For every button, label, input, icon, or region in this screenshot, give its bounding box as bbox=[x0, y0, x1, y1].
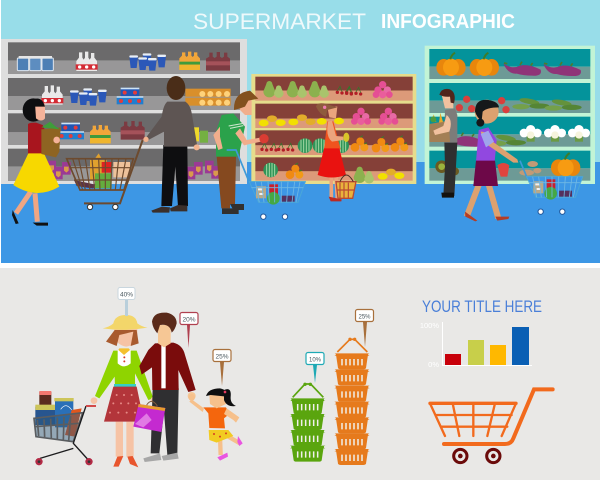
person: man with grocery bag bbox=[429, 89, 457, 198]
shopping cart: blue, right bbox=[520, 161, 583, 214]
panel: vegetable shelf bbox=[425, 46, 595, 184]
shopping cart: blue, left bbox=[227, 150, 305, 219]
divider band bbox=[0, 263, 600, 268]
person: mother with hat bbox=[91, 315, 157, 467]
bar chart: 100% bbox=[420, 321, 439, 330]
icon: magenta shopping bag bbox=[133, 401, 165, 432]
tag: 10%: 10% bbox=[309, 358, 322, 364]
bar chart bbox=[420, 321, 532, 369]
person: man in green shirt bbox=[213, 91, 269, 214]
panel: fruit shelf bbox=[251, 74, 416, 184]
tag: 20%: 20% bbox=[182, 316, 196, 324]
tag: 40% bbox=[118, 288, 135, 316]
person: father in red jacket bbox=[139, 313, 196, 462]
person: child bbox=[188, 388, 243, 461]
tag: 25% (child) bbox=[213, 350, 231, 386]
lower panel background bbox=[0, 268, 600, 480]
person: woman in red dress bbox=[316, 103, 349, 201]
tag: 25% (child): 25% bbox=[215, 354, 229, 360]
person: woman in yellow skirt bbox=[12, 98, 61, 226]
tag: 20% bbox=[180, 312, 198, 348]
basket stack: green bbox=[289, 383, 326, 462]
title: INFOGRAPHIC bbox=[381, 11, 515, 33]
tag: 25% (baskets) bbox=[356, 310, 374, 347]
panel: grey grocery shelf bbox=[1, 39, 247, 184]
title: SUPERMARKET bbox=[193, 9, 366, 34]
shopping cart: brown bbox=[67, 140, 143, 210]
chart heading: YOUR TITLE HERE bbox=[422, 298, 542, 316]
person: man in grey sweater bbox=[143, 76, 200, 213]
tag: 25% (baskets): 25% bbox=[358, 314, 371, 320]
scene floor bbox=[1, 162, 600, 263]
shopping cart: grey with goods bbox=[34, 391, 96, 465]
person: woman in purple top bbox=[465, 100, 518, 221]
basket stack: orange bbox=[333, 338, 370, 465]
tag: 10% bbox=[306, 352, 324, 383]
scene backdrop: wall bbox=[1, 0, 600, 263]
bar chart: 0% bbox=[428, 360, 439, 369]
icon: large orange cart bbox=[430, 389, 553, 463]
title bbox=[193, 9, 515, 34]
basket: red hand basket bbox=[336, 175, 356, 198]
tag: 40%: 40% bbox=[120, 292, 133, 298]
